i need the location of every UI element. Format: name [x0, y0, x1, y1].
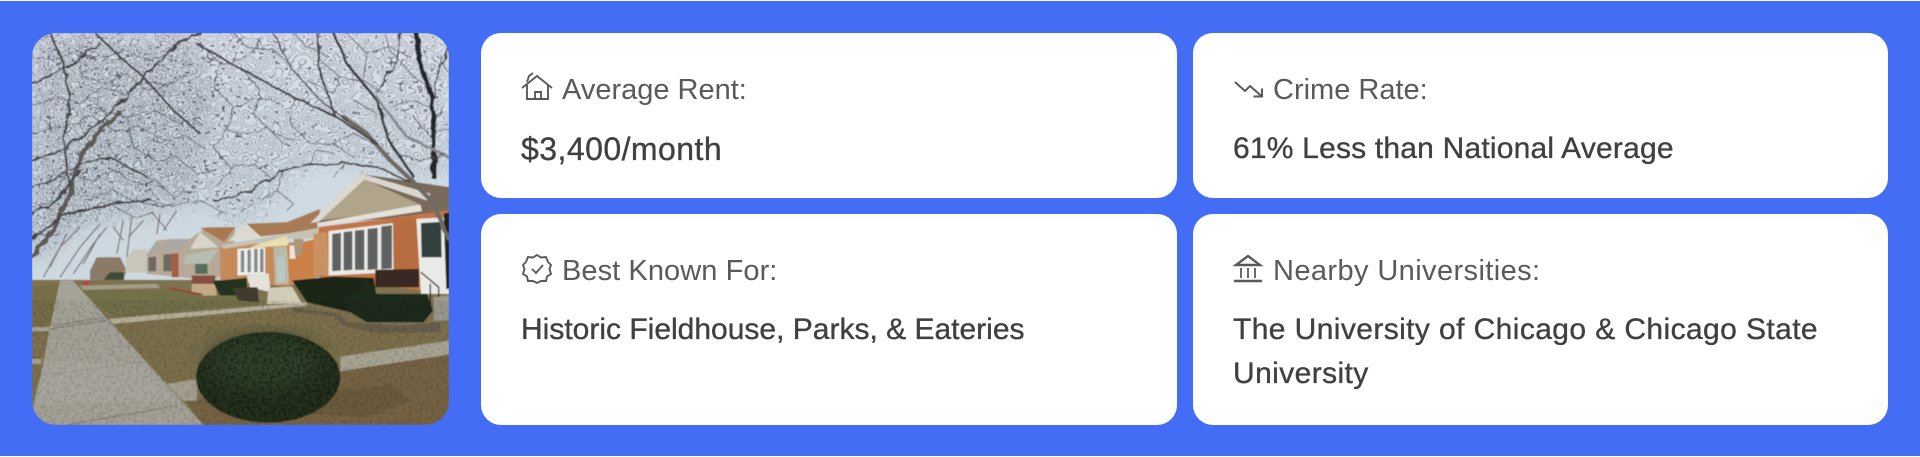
panel: nearby universities	[1193, 214, 1888, 425]
panel: crime rate: Crime Rate:	[1273, 74, 1428, 106]
sidewalks	[33, 281, 203, 425]
icon: trending down arrow	[1234, 81, 1263, 98]
value: average rent: $3,400/month	[521, 131, 722, 167]
middle house	[220, 241, 324, 287]
yard sign	[83, 281, 89, 285]
value: crime rate: 61% Less than National Average	[1233, 132, 1674, 165]
panel: best known for: Best Known For:	[562, 255, 777, 287]
ground grain	[32, 301, 449, 425]
heading: average rent	[522, 72, 747, 106]
icon: verified badge	[522, 254, 552, 284]
panel: best known for	[481, 214, 1177, 425]
heading: nearby universities	[1233, 254, 1540, 287]
icon: institution building	[1233, 254, 1264, 282]
distant trees	[43, 210, 177, 277]
main house	[310, 174, 449, 223]
bare tree branches	[32, 33, 449, 257]
heading: best known for	[522, 254, 777, 287]
photo: suburban street with bare trees and brick bungalows	[32, 33, 449, 425]
far houses	[125, 249, 148, 272]
lawn base	[32, 280, 449, 425]
panel: crime rate	[1193, 33, 1888, 198]
icon: house	[522, 72, 552, 100]
twig texture	[32, 33, 449, 267]
value: best known for: Historic Fieldhouse, Parks, & Eateries	[521, 313, 1025, 346]
panel: average rent: Average Rent:	[562, 74, 747, 106]
panel: nearby universities: Nearby Universities:	[1273, 255, 1540, 287]
shrubs	[292, 277, 377, 312]
heading: crime rate	[1234, 74, 1428, 106]
panel: average rent	[481, 33, 1177, 198]
value: nearby universities: The University of Chicago & Chicago State University	[1233, 313, 1818, 390]
round shrub	[196, 332, 340, 423]
